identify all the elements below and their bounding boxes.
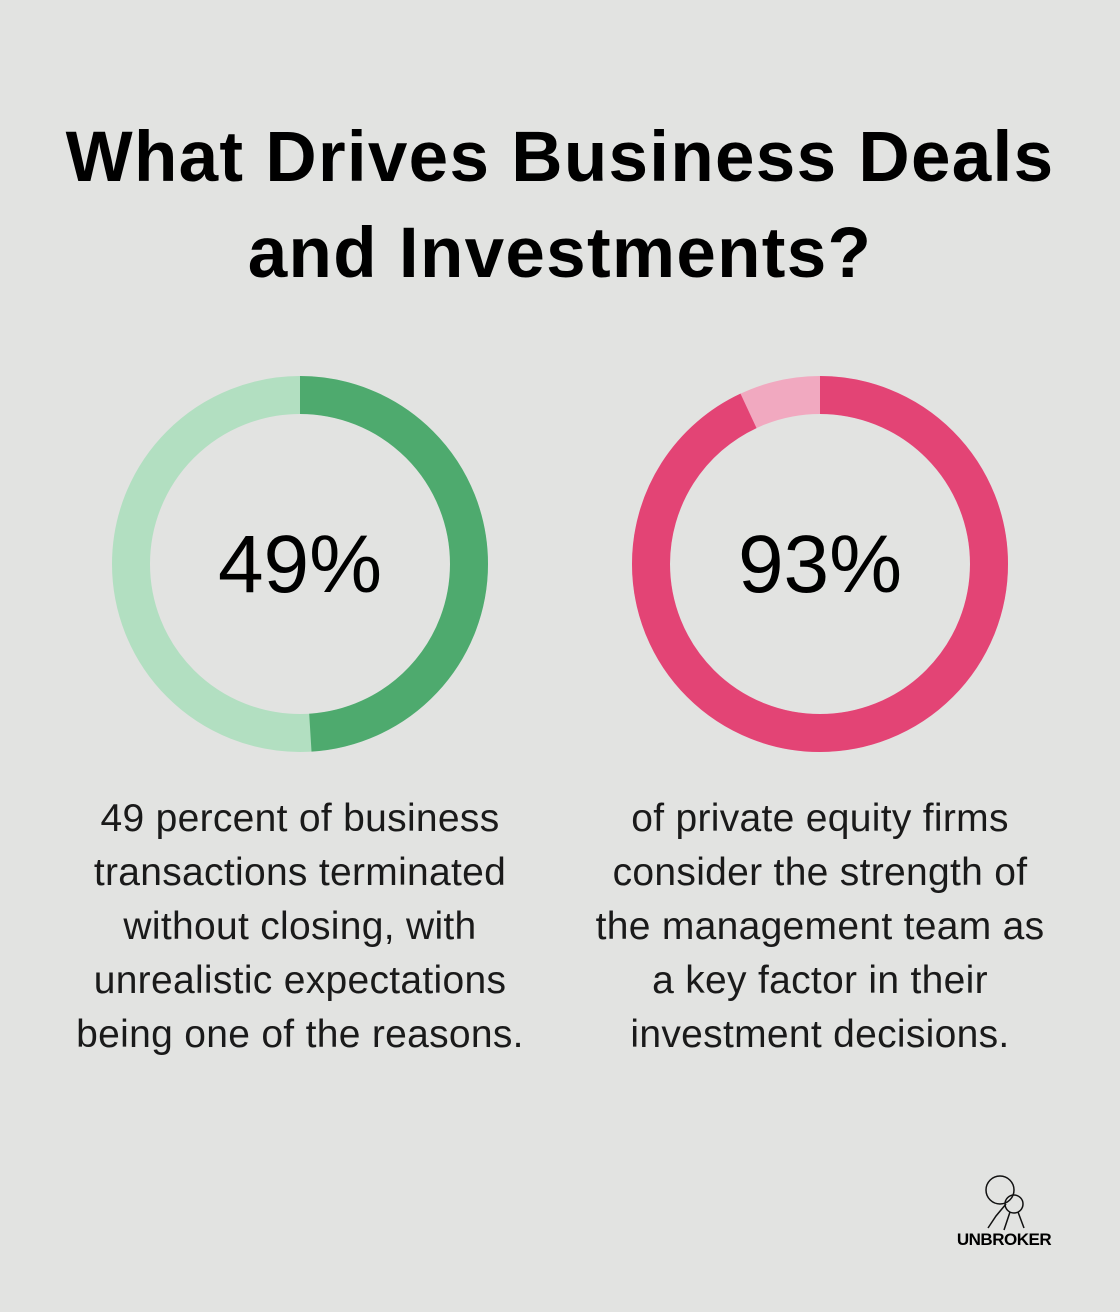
text: left description: transactions terminated	[94, 851, 506, 894]
text: right description: a key factor in their	[652, 959, 988, 1002]
text: right description: of private equity firms	[631, 797, 1009, 840]
title: and Investments?	[248, 214, 872, 293]
chart: 49% donut	[112, 376, 488, 752]
chart: 93% donut	[632, 376, 1008, 752]
text: left description: without closing, with	[123, 905, 477, 948]
text: left description: being one of the reasons.	[76, 1013, 524, 1056]
chart: 93% donut: 93%	[738, 519, 902, 610]
text: right description: consider the strength of	[613, 851, 1027, 894]
logo: unbroker	[957, 1175, 1052, 1249]
text: right description	[596, 797, 1044, 1056]
title: What Drives Business Deals	[66, 118, 1054, 197]
text: right description: investment decisions.	[630, 1013, 1010, 1056]
text: right description: the management team as	[596, 905, 1044, 948]
text: left description	[76, 797, 524, 1056]
chart: 49% donut: 49%	[218, 519, 382, 610]
text: left description: unrealistic expectations	[94, 959, 506, 1002]
title	[66, 118, 1054, 293]
logo: unbroker: UNBROKER	[957, 1230, 1051, 1249]
text: left description: 49 percent of business	[100, 797, 500, 840]
